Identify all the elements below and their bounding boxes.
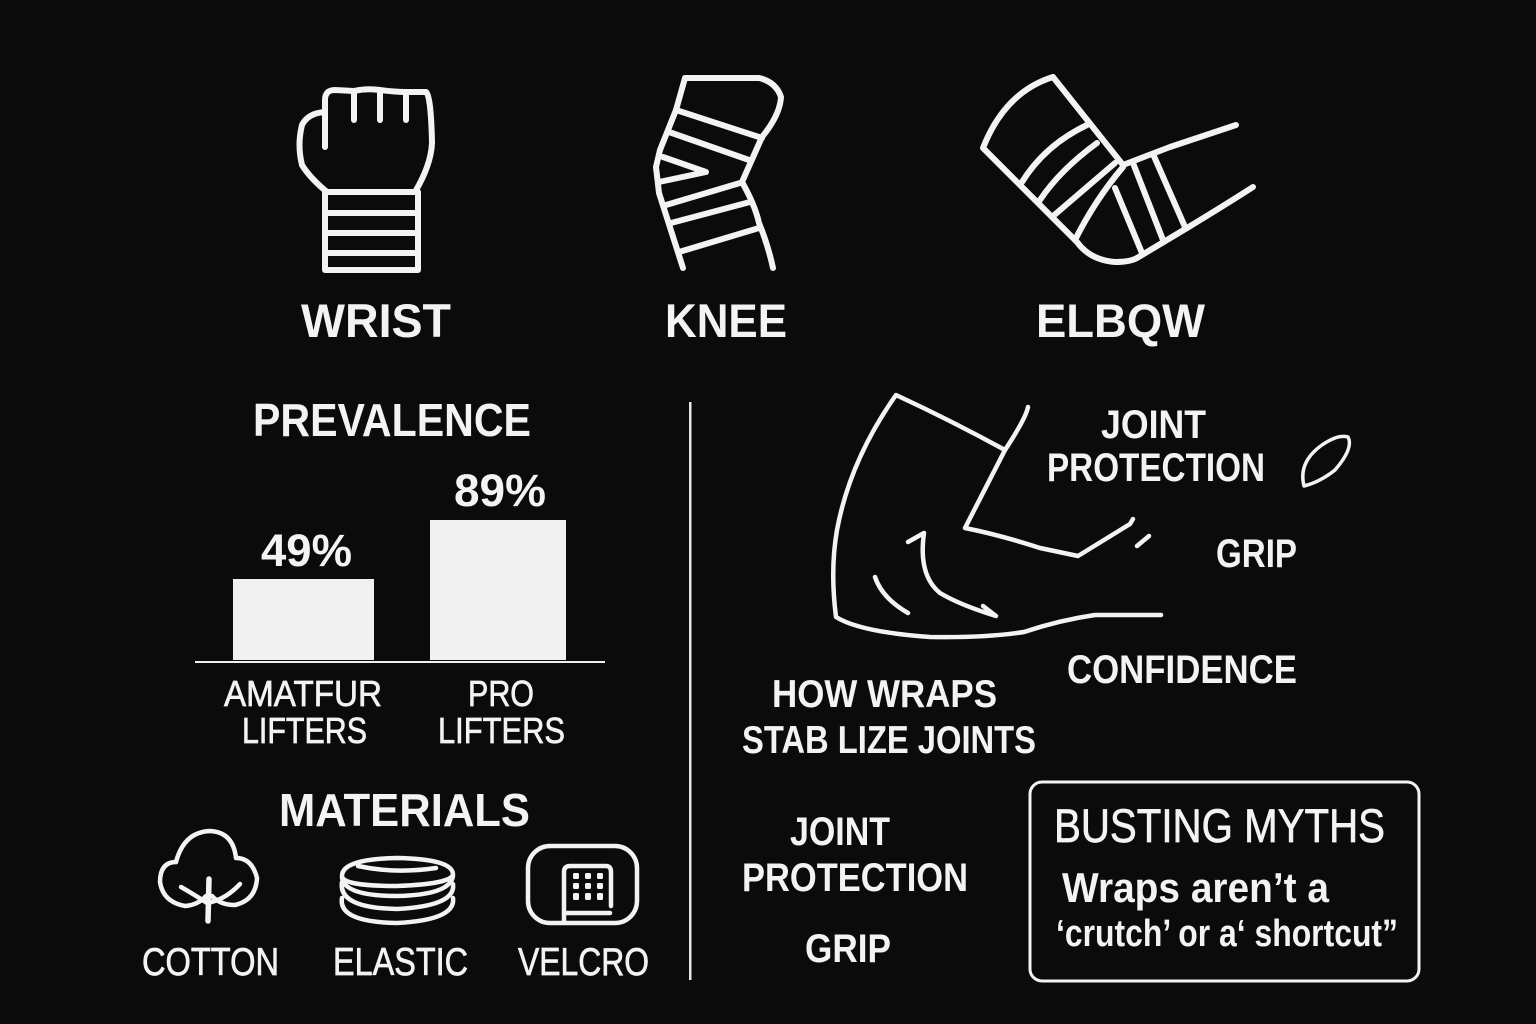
label: grip lower: GRIP — [805, 927, 891, 971]
label: joint protection lower: JOINT — [790, 810, 890, 854]
label: elastic: ELASTIC — [333, 941, 468, 984]
label: wrist: WRIST — [301, 294, 451, 347]
axis label: amateur lifters: LIFTERS — [242, 710, 367, 751]
axis label: pro lifters: PRO — [468, 673, 534, 714]
icon: velcro — [528, 846, 637, 923]
label: joint protection lower: PROTECTION — [742, 856, 968, 900]
label: elbow: ELBQW — [1036, 294, 1206, 347]
label: cotton: COTTON — [142, 941, 279, 984]
panel: materials — [142, 784, 649, 984]
label: grip: GRIP — [1216, 532, 1297, 576]
heading: how wraps stabilize joints — [742, 673, 1036, 762]
icon: wrapped elbow — [983, 77, 1253, 262]
diagram: bent arm with arrow — [833, 395, 1349, 637]
icon: wrapped wrist — [300, 89, 432, 270]
callout body — [1056, 864, 1398, 955]
axis label: amateur lifters: AMATFUR — [224, 673, 382, 714]
panel: prevalence — [195, 394, 605, 751]
callout: busting myths — [1030, 782, 1419, 981]
label: joint protection: JOINT — [1101, 403, 1206, 447]
axis label: pro lifters — [438, 673, 565, 751]
axis label: pro lifters: LIFTERS — [438, 710, 565, 751]
value: pro: 89% — [454, 465, 546, 516]
axis label: amateur lifters — [224, 673, 382, 751]
callout body: Wraps aren’t a — [1062, 864, 1330, 911]
heading: how wraps stabilize joints: HOW WRAPS — [772, 673, 997, 716]
callout body: ‘crutch’ or a‘ shortcut” — [1056, 913, 1398, 955]
label: joint protection: PROTECTION — [1047, 446, 1265, 490]
heading: materials: MATERIALS — [279, 784, 530, 836]
label: knee: KNEE — [665, 294, 787, 347]
icon: cotton — [160, 831, 257, 921]
label: joint protection — [1047, 403, 1265, 490]
panel: how wraps stabilize joints — [742, 395, 1349, 971]
label: joint protection lower — [742, 810, 968, 900]
value: amateur: 49% — [261, 525, 352, 576]
heading: how wraps stabilize joints: STAB LIZE JOINTS — [742, 719, 1036, 762]
bar chart — [195, 465, 605, 751]
bar: pro lifters — [430, 520, 566, 660]
icon: wrapped knee — [656, 78, 781, 268]
label: confidence: CONFIDENCE — [1067, 648, 1297, 692]
icon: leaf — [1303, 436, 1349, 486]
icon: elastic — [342, 858, 453, 923]
panel: wrap types — [300, 77, 1253, 347]
callout heading: BUSTING MYTHS — [1054, 799, 1385, 852]
bar: amateur lifters — [233, 579, 374, 660]
heading: prevalence: PREVALENCE — [253, 394, 531, 446]
label: velcro: VELCRO — [518, 941, 649, 984]
